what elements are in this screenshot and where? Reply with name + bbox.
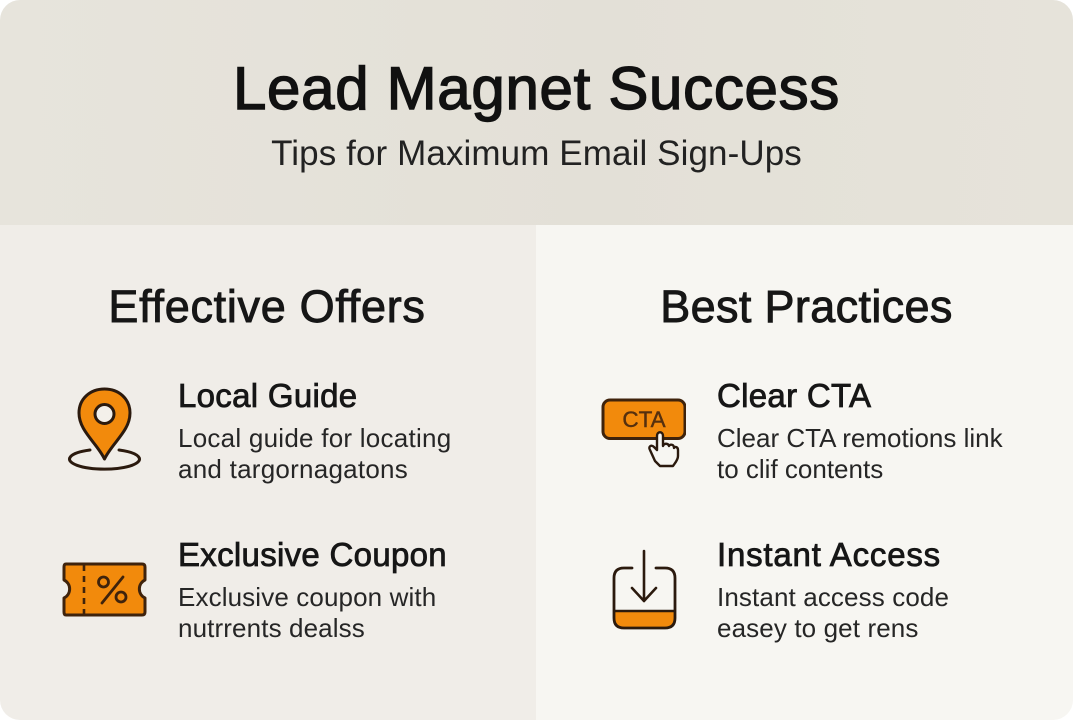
header band: [0, 0, 1073, 225]
item text: easey to get rens: [717, 613, 918, 643]
icon: cta button: CTA: [622, 407, 666, 432]
item text: Local guide for locating: [178, 423, 451, 453]
item heading: Clear CTA: [717, 377, 871, 414]
item text: [717, 582, 949, 643]
item text: [178, 582, 436, 643]
icon: download: [612, 550, 676, 630]
subtitle: Tips for Maximum Email Sign-Ups: [271, 134, 802, 173]
icon: cta button: [602, 398, 686, 468]
item heading: Local Guide: [178, 377, 357, 414]
item: clear cta: [717, 377, 1003, 484]
item text: and targornagatons: [178, 454, 408, 484]
item heading: Instant Access: [717, 536, 941, 573]
panel: best practices: [536, 225, 1073, 720]
item text: Instant access code: [717, 582, 949, 612]
item text: [717, 423, 1003, 484]
icon: map pin: [68, 388, 142, 471]
title: Lead Magnet Success: [233, 55, 840, 122]
item text: [178, 423, 451, 484]
panel: effective offers: [0, 225, 536, 720]
item heading: Exclusive Coupon: [178, 536, 447, 573]
item text: Exclusive coupon with: [178, 582, 436, 612]
item text: nutrrents dealss: [178, 613, 365, 643]
item: local guide: [178, 377, 451, 484]
heading: effective offers: Effective Offers: [108, 281, 426, 332]
item: instant access: [717, 536, 949, 643]
icon: coupon: [62, 562, 146, 616]
item text: to clif contents: [717, 454, 883, 484]
item text: Clear CTA remotions link: [717, 423, 1003, 453]
item: exclusive coupon: [178, 536, 447, 643]
heading: best practices: Best Practices: [660, 281, 953, 332]
